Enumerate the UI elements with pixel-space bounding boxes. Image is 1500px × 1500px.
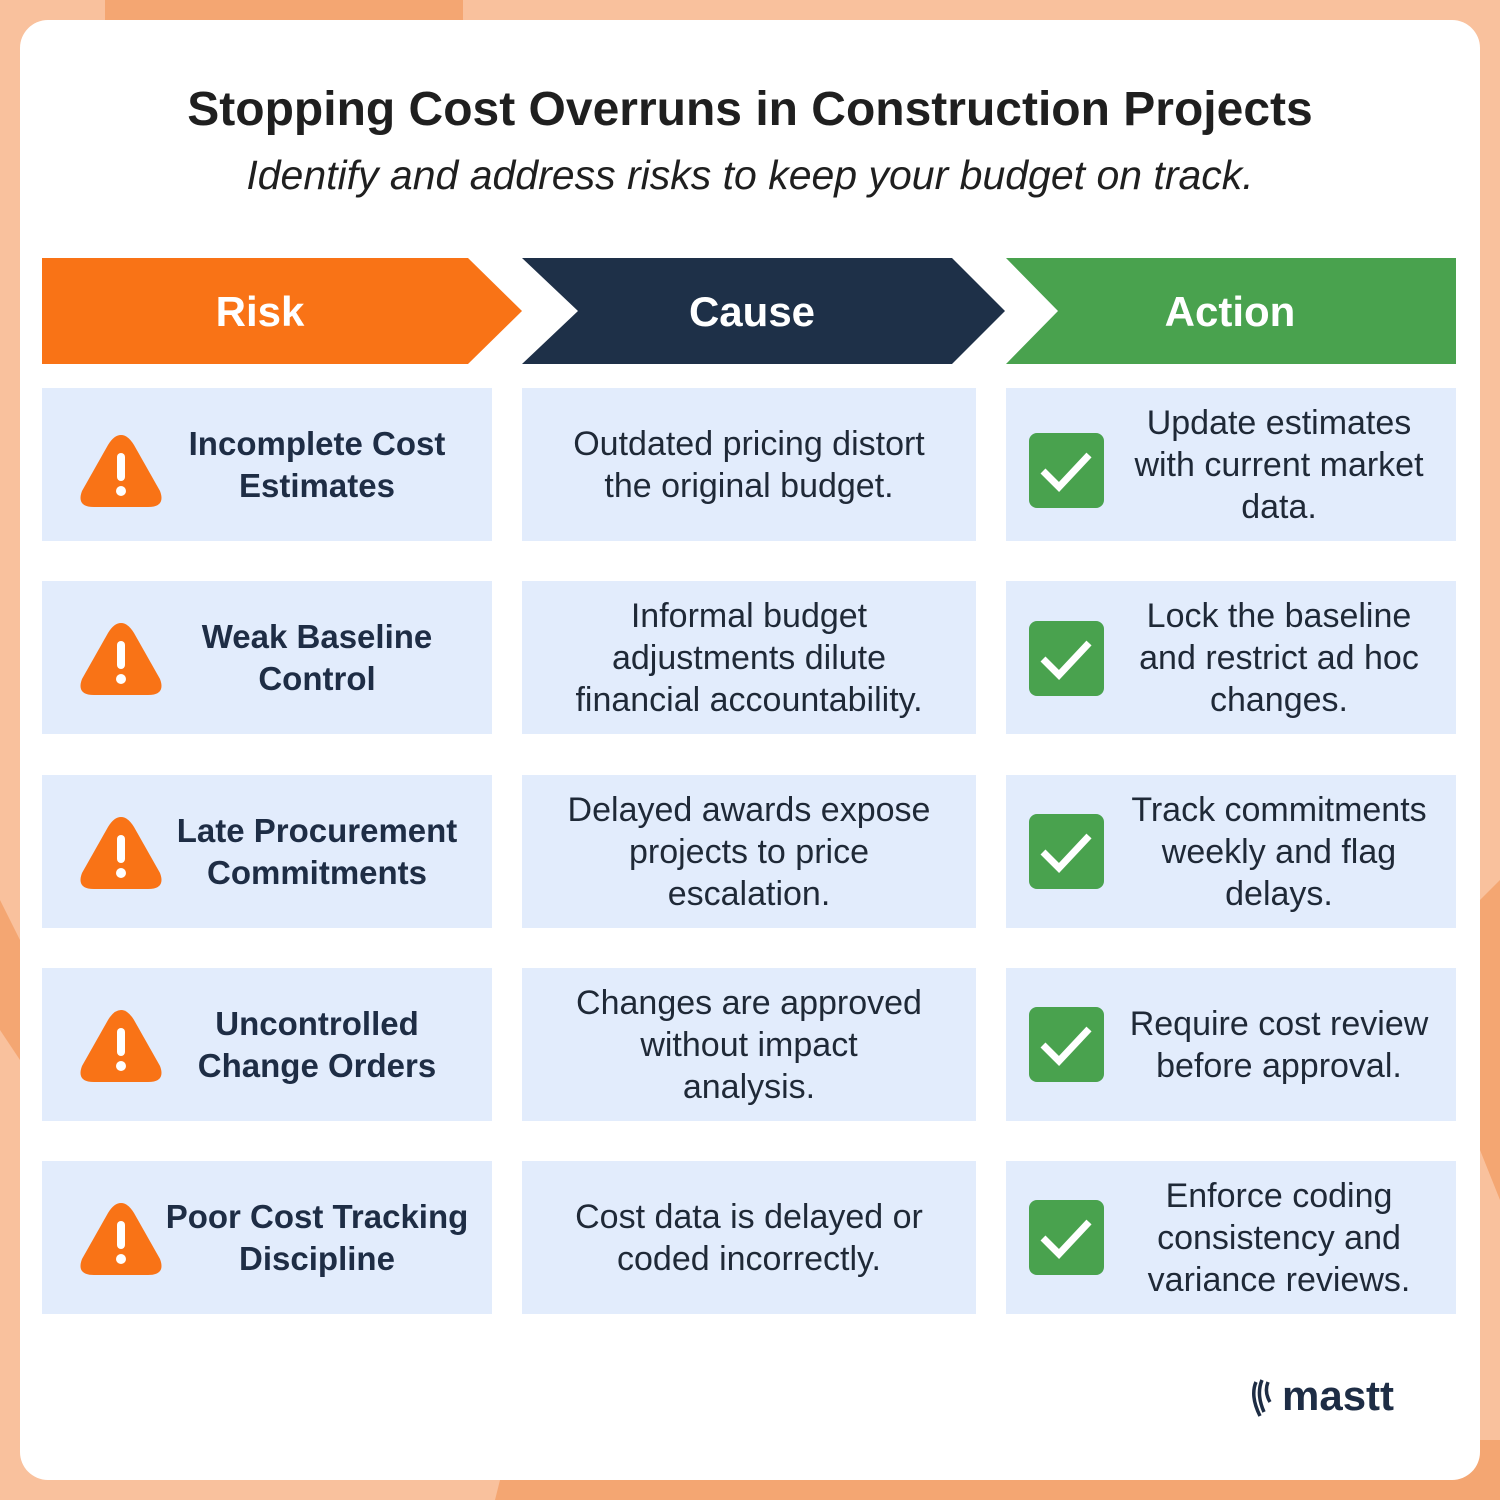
row 3 risk: Commitments: [207, 854, 427, 890]
row 3 action: [1006, 775, 1456, 928]
row 2 action: Lock the baseline: [1147, 596, 1411, 634]
header: action: Action: [1165, 288, 1295, 335]
row 2 cause: financial accountability.: [575, 680, 923, 718]
row 3 cause: Delayed awards expose: [568, 790, 930, 828]
title: Stopping Cost Overruns in Construction Projects: [187, 83, 1313, 136]
row 3 risk: [42, 775, 492, 928]
row 1 risk: [42, 388, 492, 541]
row 4 cause: without impact: [640, 1026, 858, 1064]
row 2 cause: [522, 581, 976, 734]
row 1 action: with current market: [1134, 446, 1424, 484]
row 1 action: [1006, 388, 1456, 541]
logo: mastt: mastt: [1282, 1372, 1394, 1419]
header: action: [1006, 258, 1456, 364]
row 1 cause: Outdated pricing distort: [573, 424, 925, 462]
row 5 cause: coded incorrectly.: [617, 1240, 881, 1278]
row 2 action: and restrict ad hoc: [1139, 638, 1419, 676]
row 4 cause: analysis.: [683, 1068, 815, 1106]
row 3 action: delays.: [1225, 874, 1333, 912]
row 5 risk: [42, 1161, 492, 1314]
row 5 cause: [522, 1161, 976, 1314]
header: cause: [522, 258, 1005, 364]
header: risk: [42, 258, 522, 364]
row 1 cause: the original budget.: [604, 466, 894, 504]
row 3 cause: [522, 775, 976, 928]
row 2 risk: [42, 581, 492, 734]
row 1 action: data.: [1241, 488, 1317, 526]
row 5 action: Enforce coding: [1166, 1176, 1392, 1214]
header: risk: Risk: [216, 288, 305, 335]
row 4 cause: Changes are approved: [576, 984, 922, 1022]
row 2 cause: Informal budget: [631, 596, 867, 634]
row 4 cause: [522, 968, 976, 1121]
row 5 risk: Poor Cost Tracking: [166, 1198, 468, 1234]
row 3 risk: Late Procurement: [177, 812, 457, 848]
row 5 risk: Discipline: [239, 1240, 395, 1276]
row 1 action: Update estimates: [1147, 404, 1411, 442]
header: cause: Cause: [689, 288, 815, 335]
row 4 action: Require cost review: [1130, 1004, 1428, 1042]
row 2 risk: Control: [258, 660, 376, 696]
row 1 cause: [522, 388, 976, 541]
column headers: [42, 258, 1456, 364]
row 4 risk: Uncontrolled: [215, 1004, 419, 1042]
row 1 risk: Incomplete Cost: [189, 424, 445, 462]
row 2 cause: adjustments dilute: [612, 638, 886, 676]
row 2 action: changes.: [1210, 680, 1348, 718]
row 5 action: consistency and: [1157, 1218, 1401, 1256]
row 3 cause: projects to price: [629, 832, 869, 870]
row 5 cause: Cost data is delayed or: [575, 1198, 923, 1236]
row 2 risk: Weak Baseline: [202, 618, 432, 654]
row 5 action: variance reviews.: [1148, 1260, 1410, 1298]
subtitle: Identify and address risks to keep your budget on track.: [246, 152, 1254, 198]
row 3 cause: escalation.: [668, 874, 830, 912]
row 4 action: [1006, 968, 1456, 1121]
row 2 action: [1006, 581, 1456, 734]
row 1 risk: Estimates: [239, 466, 395, 504]
row 3 action: Track commitments: [1131, 790, 1427, 828]
row 5 action: [1006, 1161, 1456, 1314]
row 4 risk: Change Orders: [198, 1046, 436, 1084]
row 4 action: before approval.: [1156, 1046, 1402, 1084]
row 4 risk: [42, 968, 492, 1121]
row 3 action: weekly and flag: [1162, 832, 1396, 870]
